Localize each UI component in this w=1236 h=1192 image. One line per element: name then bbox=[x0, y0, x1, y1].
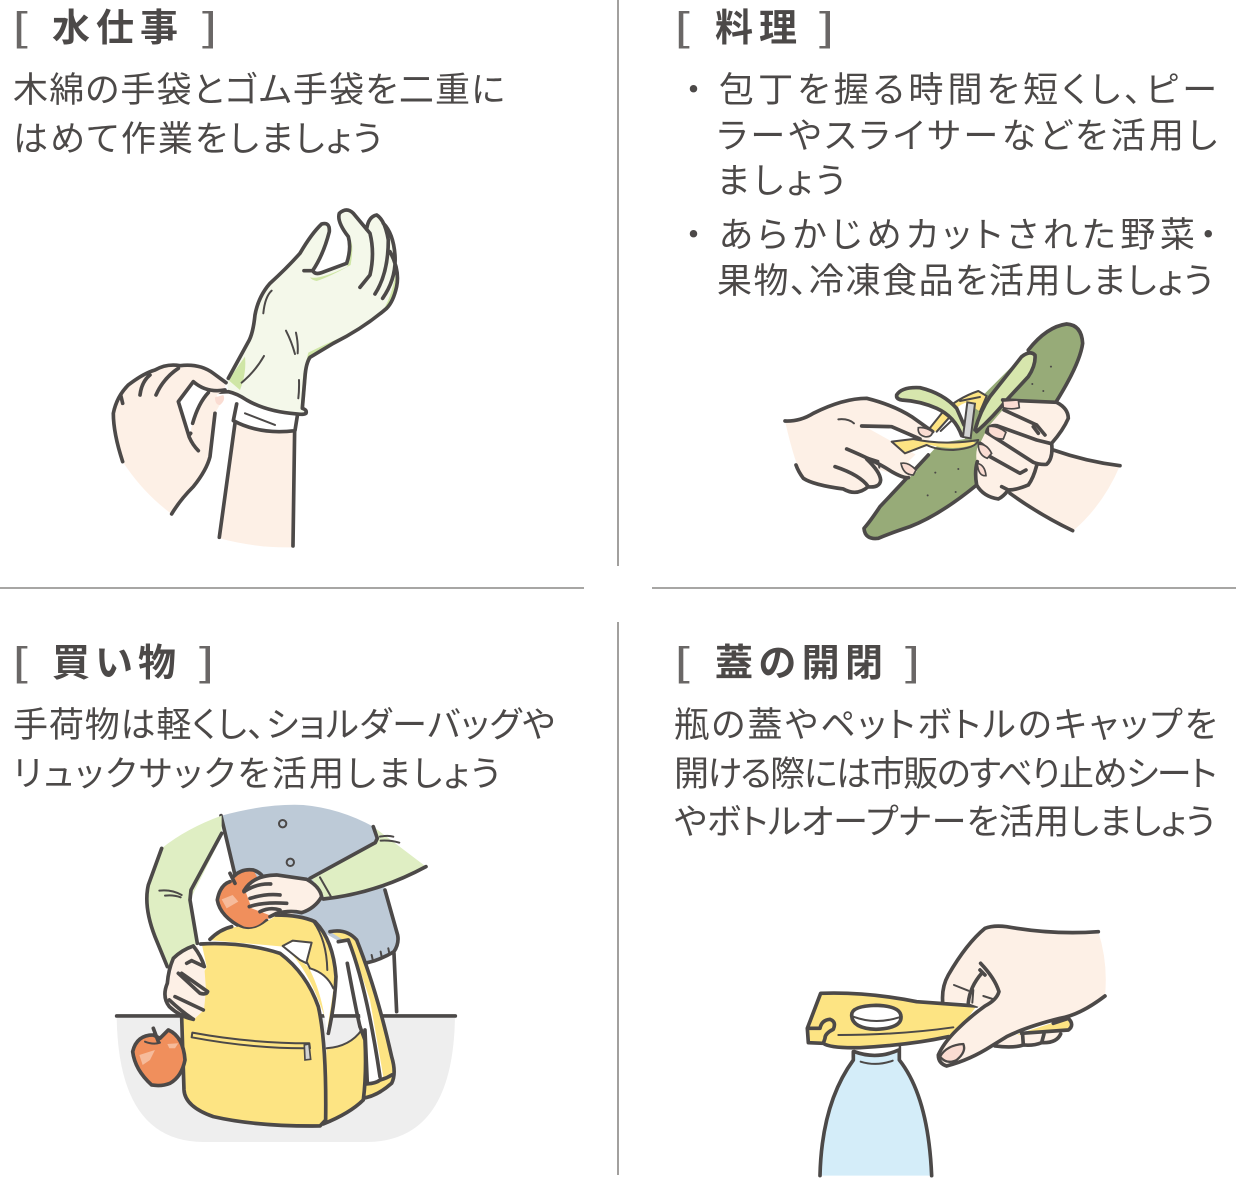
peel: strip bbox=[975, 353, 1035, 432]
text block: 料理の説明: あらかじめカットされた野菜・ bbox=[719, 216, 1217, 255]
backpack body bbox=[182, 943, 325, 1126]
heading: 料理 bbox=[675, 4, 834, 50]
cucumber seeds bbox=[927, 366, 1052, 496]
opener bbox=[807, 993, 977, 1048]
pulling hand bbox=[113, 365, 226, 514]
text block: 蓋の開閉の説明: 開ける際には市販のすべり止めシート bbox=[674, 755, 1217, 794]
right sleeve bbox=[312, 827, 426, 898]
backpack top bbox=[208, 913, 337, 1033]
opener lower handle bbox=[1017, 1018, 1072, 1035]
text block: 料理の説明: ・ bbox=[676, 216, 711, 255]
heading: 水仕事: ] bbox=[202, 4, 217, 48]
text block: 水仕事の説明: 木綿の手袋とゴム手袋を二重に bbox=[13, 71, 505, 110]
peeler back bbox=[928, 391, 987, 432]
apple on table bbox=[133, 1030, 185, 1086]
text block: 料理の説明: ・ bbox=[676, 71, 711, 110]
text block: 料理の説明 bbox=[676, 71, 1217, 301]
icon: peeling a cucumber with a peeler bbox=[785, 324, 1120, 539]
heading: 水仕事 bbox=[13, 4, 217, 50]
heading: 水仕事: 水仕事 bbox=[52, 8, 178, 50]
blade bbox=[963, 402, 975, 438]
icon: hands putting on a rubber glove bbox=[113, 210, 398, 547]
heading: 蓋の開閉: 蓋の開閉 bbox=[715, 643, 883, 685]
text block: 水仕事の説明 bbox=[13, 71, 505, 159]
text block: 水仕事の説明: はめて作業をしましょう bbox=[13, 120, 382, 159]
heading: 買い物: ] bbox=[199, 639, 214, 683]
heading: 蓋の開閉: [ bbox=[675, 639, 690, 683]
panel: 水仕事 bbox=[13, 4, 505, 547]
text block: 買い物の説明: 手荷物は軽くし、ショルダーバッグや bbox=[13, 706, 555, 745]
text block: 買い物の説明 bbox=[13, 706, 555, 794]
heading: 水仕事: [ bbox=[13, 4, 28, 48]
panel: 買い物 bbox=[13, 639, 555, 1142]
text block: 買い物の説明: リュックサックを活用しましょう bbox=[13, 755, 500, 794]
peeler handle bbox=[865, 439, 977, 467]
heading: 料理: [ bbox=[675, 4, 690, 48]
icon: packing an apple into a backpack bbox=[117, 805, 455, 1142]
back fingers bbox=[993, 1032, 1060, 1048]
peel: curled bbox=[897, 388, 964, 437]
icon: opening a bottle cap with an opener bbox=[807, 926, 1106, 1176]
right hand bbox=[976, 400, 1068, 499]
heading: 買い物: 買い物 bbox=[52, 643, 176, 685]
table background bbox=[117, 1017, 455, 1142]
heading: 買い物 bbox=[13, 639, 214, 685]
text block: 蓋の開閉の説明 bbox=[674, 706, 1217, 842]
bottle bbox=[820, 1047, 932, 1176]
cuff bbox=[233, 403, 297, 431]
heading: 料理: 料理 bbox=[715, 8, 797, 50]
heading: 蓋の開閉 bbox=[675, 639, 920, 685]
apple in hand bbox=[217, 870, 277, 929]
panel: 料理 bbox=[675, 4, 1217, 539]
heading: 料理: ] bbox=[819, 4, 834, 48]
hand on backpack bbox=[165, 946, 206, 1020]
thumbnail bbox=[940, 1044, 964, 1062]
text block: 蓋の開閉の説明: 瓶の蓋やペットボトルのキャップを bbox=[674, 706, 1217, 745]
glove bbox=[227, 210, 398, 414]
forearm bbox=[219, 422, 295, 547]
cucumber bbox=[864, 324, 1083, 539]
text block: 料理の説明: ラーやスライサーなどを活用し bbox=[717, 117, 1217, 156]
text block: 料理の説明: 果物、冷凍食品を活用しましょう bbox=[717, 262, 1213, 301]
vest bbox=[222, 805, 398, 963]
heading: 蓋の開閉: ] bbox=[905, 639, 920, 683]
table edge bbox=[117, 1010, 455, 1021]
text block: 料理の説明: 包丁を握る時間を短くし、ピー bbox=[719, 71, 1217, 110]
right forearm bbox=[1010, 450, 1120, 531]
pocket zipper bbox=[192, 1033, 310, 1048]
right strap bbox=[330, 931, 393, 1098]
ring gap bbox=[937, 412, 967, 443]
panel: 蓋の開閉 bbox=[674, 639, 1217, 1176]
cap bbox=[852, 1005, 901, 1029]
hand bbox=[938, 926, 1106, 1066]
left sleeve bbox=[147, 816, 222, 967]
text block: 料理の説明: ましょう bbox=[717, 162, 845, 201]
tissue bbox=[283, 942, 312, 968]
glove shading bbox=[228, 242, 397, 410]
heading: 買い物: [ bbox=[13, 639, 28, 683]
hand on apple bbox=[245, 875, 322, 917]
text block: 蓋の開閉の説明: やボトルオープナーを活用しましょう bbox=[674, 803, 1215, 842]
left hand bbox=[785, 398, 933, 493]
